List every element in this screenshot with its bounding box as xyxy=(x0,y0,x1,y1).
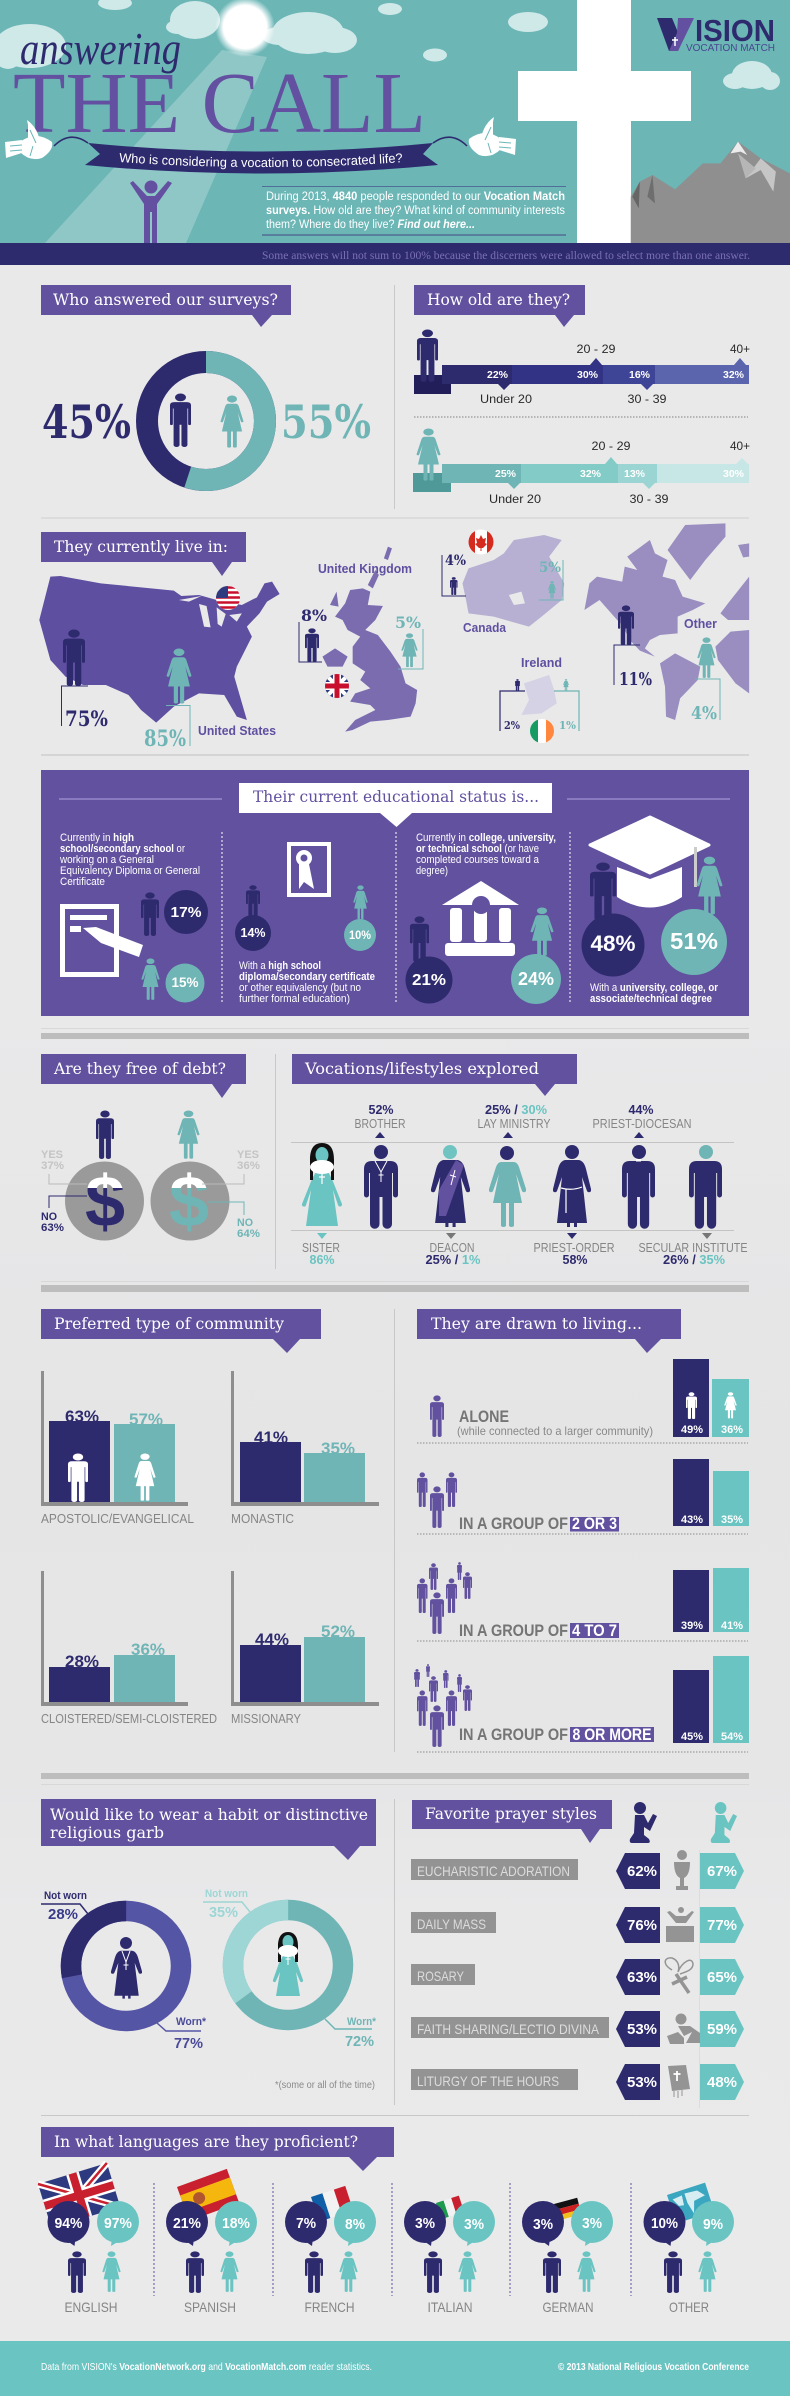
column: Spanish: SPANISH xyxy=(184,2299,236,2315)
column: Other: OTHER xyxy=(669,2299,709,2315)
bottom labels: 86% xyxy=(310,1253,334,1267)
flag: Ireland xyxy=(530,719,554,743)
label: male not worn xyxy=(41,1890,88,1923)
bottom labels: SECULAR INSTITUTE xyxy=(638,1241,748,1255)
row: group of 8 or more xyxy=(414,1656,749,1747)
map: other world: Other xyxy=(684,617,717,631)
column: Spanish: 21% xyxy=(173,2216,201,2232)
heading xyxy=(41,1309,321,1353)
row: rosary xyxy=(411,1958,744,1995)
icon: female coin: $ xyxy=(169,1162,209,1242)
chart: apostolic: 57% xyxy=(129,1410,163,1429)
icon: form and pencil xyxy=(62,906,143,974)
label: female worn xyxy=(325,2016,377,2050)
chart: missionary: 44% xyxy=(255,1630,289,1649)
person with raised arms xyxy=(130,180,172,243)
map: United States: 75% xyxy=(65,706,108,731)
row: rosary: ROSARY xyxy=(417,1968,465,1984)
heading xyxy=(41,1799,376,1860)
female age bar: Under 20 xyxy=(489,492,541,506)
female age bar: 40+ xyxy=(730,439,750,453)
heading xyxy=(414,285,585,327)
chart: monastic: 35% xyxy=(321,1439,355,1458)
column: Other: 10% xyxy=(651,2216,678,2232)
row: faith sharing: FAITH SHARING/LECTIO DIVINA xyxy=(417,2021,600,2037)
map: United States: United States xyxy=(198,724,276,738)
column: German: 3% xyxy=(582,2216,602,2232)
chart: cloistered: 36% xyxy=(131,1640,165,1659)
icon: male coin xyxy=(65,1110,144,1242)
heading: Vocations/lifestyles explored xyxy=(304,1060,539,1078)
top labels: BROTHER xyxy=(354,1117,406,1131)
map: Ireland xyxy=(500,656,579,743)
chart: cloistered: CLOISTERED/SEMI-CLOISTERED xyxy=(41,1712,217,1726)
column: high school students: 15% xyxy=(172,974,199,990)
cross xyxy=(518,0,691,243)
column: high school diploma: 14% xyxy=(240,926,266,940)
labels xyxy=(41,1149,260,1240)
row: rosary: 63% xyxy=(627,1970,657,1986)
map: Ireland: 1% xyxy=(559,719,577,732)
column: English: 97% xyxy=(104,2216,132,2232)
note band: Some answers will not sum to 100% because the discerners were allowed to select more than one answer. xyxy=(262,250,750,262)
icon: chalice xyxy=(674,1850,690,1890)
icon: building xyxy=(442,881,519,956)
row: faith sharing: 59% xyxy=(707,2022,737,2038)
label: male worn: 77% xyxy=(174,2035,203,2052)
column: university degree: 51% xyxy=(670,928,718,954)
male age bar: 20 - 29 xyxy=(576,342,616,356)
bottom labels xyxy=(302,1233,748,1267)
top labels: 44% xyxy=(628,1103,654,1117)
intro text: surveys. How old are they? What kind of community interests xyxy=(266,205,565,217)
figure: sister xyxy=(302,1143,342,1226)
row: alone: 49% xyxy=(681,1424,703,1436)
map: Canada xyxy=(442,529,564,635)
column: German: GERMAN xyxy=(542,2299,594,2315)
bottom labels: PRIEST-ORDER xyxy=(534,1241,614,1255)
heading: Would like to wear a habit or distinctive xyxy=(50,1806,368,1824)
panel: vocations explored xyxy=(291,1054,748,1267)
male age bar: Under 20 xyxy=(480,392,532,406)
column: German xyxy=(522,2201,613,2315)
row: faith sharing: 53% xyxy=(627,2022,657,2038)
footer: © 2013 National Religious Vocation Conference xyxy=(558,2361,749,2373)
panel: who answered our surveys xyxy=(41,285,371,480)
icon: kneeling man xyxy=(630,1802,657,1843)
ribbon banner xyxy=(54,136,468,174)
heading: Who answered our surveys? xyxy=(53,291,278,309)
labels: YES xyxy=(237,1149,259,1161)
figure: priest diocesan xyxy=(622,1145,655,1229)
column: university degree xyxy=(582,817,727,1005)
flag: France xyxy=(311,2186,353,2222)
column: French: 7% xyxy=(296,2216,316,2232)
row: daily mass: 77% xyxy=(707,1918,737,1934)
chart: apostolic: 63% xyxy=(65,1407,99,1426)
sun xyxy=(215,0,275,57)
row: group of 4 to 7: 39% xyxy=(681,1620,703,1632)
column: high school diploma: With a high school xyxy=(239,960,321,972)
heading xyxy=(412,1800,612,1843)
chart: monastic: 41% xyxy=(254,1428,288,1447)
male age bar: 30% xyxy=(577,370,598,381)
flag: Canada xyxy=(468,529,494,555)
female age bar: 20 - 29 xyxy=(592,439,631,453)
panel: favorite prayer styles xyxy=(411,1800,744,2108)
bottom labels: DEACON xyxy=(430,1241,474,1255)
column: college: Currently in college, university, xyxy=(416,832,556,844)
ribbon banner: Who is considering a vocation to consecrated life? xyxy=(120,153,402,170)
column: college: degree) xyxy=(416,865,448,877)
flag: UK large xyxy=(38,2163,120,2228)
row: alone xyxy=(430,1359,749,1438)
figure: brother xyxy=(364,1145,398,1229)
column: high school diploma: or other equivalency (but no xyxy=(239,982,361,994)
row: group of 4 to 7: IN A GROUP OF xyxy=(459,1622,568,1640)
label: female worn: 72% xyxy=(345,2033,374,2050)
map: other world xyxy=(584,523,749,724)
top labels: LAY MINISTRY xyxy=(478,1117,551,1131)
labels: YES xyxy=(41,1149,63,1161)
column: high school diploma: diploma/secondary certificate xyxy=(239,971,375,983)
row: group of 8 or more: IN A GROUP OF xyxy=(459,1726,568,1744)
icon: reader xyxy=(667,2014,700,2044)
chart: missionary: MISSIONARY xyxy=(231,1712,302,1726)
chart: monastic: MONASTIC xyxy=(231,1512,294,1526)
icon: male coin: $ xyxy=(85,1162,125,1242)
row: daily mass xyxy=(411,1907,744,1943)
label: male worn xyxy=(157,2016,207,2052)
column: Other xyxy=(644,2201,734,2315)
female age bar xyxy=(413,429,750,506)
labels: 64% xyxy=(237,1228,260,1240)
top labels: 25% / 30% xyxy=(485,1103,547,1117)
label: male worn: Worn* xyxy=(176,2016,207,2028)
column: Spanish xyxy=(166,2201,257,2315)
label: female not worn: Not worn xyxy=(205,1888,248,1900)
chart: cloistered xyxy=(41,1571,217,1726)
title: the call: THE CALL xyxy=(13,54,426,151)
heading: They are drawn to living... xyxy=(431,1315,642,1333)
row: eucharistic adoration: EUCHARISTIC ADORATION xyxy=(417,1863,570,1879)
column: English xyxy=(48,2201,139,2315)
panel: preferred type of community xyxy=(41,1309,379,1726)
map: United Kingdom xyxy=(299,547,423,732)
map: Ireland: Ireland xyxy=(521,656,562,670)
flag: world map xyxy=(667,2183,714,2224)
panel: drawn to living xyxy=(414,1309,749,1752)
map: United States xyxy=(39,576,280,752)
row: liturgy of the hours: LITURGY OF THE HOURS xyxy=(417,2073,559,2089)
column: Italian: 3% xyxy=(464,2217,484,2233)
title: answering: answering xyxy=(20,23,181,74)
column: college: 24% xyxy=(518,969,554,989)
row: liturgy of the hours: 53% xyxy=(627,2075,657,2091)
row: daily mass: 76% xyxy=(627,1918,657,1934)
icon: prayer book xyxy=(668,2065,690,2098)
row: faith sharing xyxy=(411,2011,744,2047)
heading xyxy=(41,532,246,576)
column: French: FRENCH xyxy=(304,2299,354,2315)
panel: languages xyxy=(38,2127,734,2315)
panel: they currently live in xyxy=(39,523,749,752)
dove left xyxy=(5,120,52,159)
intro text: During 2013, 4840 people responded to our Vocation Match xyxy=(266,191,565,203)
footnote: *(some or all of the time) xyxy=(275,2080,375,2091)
label: male not worn: Not worn xyxy=(44,1890,87,1902)
footer: Data from VISION's VocationNetwork.org and VocationMatch.com reader statistics. xyxy=(41,2361,372,2373)
label: female not worn xyxy=(203,1888,250,1921)
intro text xyxy=(262,186,566,236)
column: university degree: With a university, college, or xyxy=(590,982,719,994)
row: group of 2 or 3: 35% xyxy=(721,1514,743,1526)
heading xyxy=(292,1054,577,1096)
row: rosary: 65% xyxy=(707,1970,737,1986)
chart: apostolic xyxy=(41,1371,194,1526)
panel: how old are they xyxy=(413,285,750,506)
column: university degree: 48% xyxy=(590,931,636,956)
map: United Kingdom: United Kingdom xyxy=(318,562,412,576)
heading: Are they free of debt? xyxy=(53,1060,226,1078)
map: Canada: 5% xyxy=(539,560,561,576)
donut: female garb xyxy=(211,1888,365,2042)
map: Ireland: 2% xyxy=(504,719,520,732)
light beam xyxy=(45,50,267,243)
row: liturgy of the hours xyxy=(411,2064,744,2100)
donut: male garb xyxy=(62,1902,190,2030)
row: group of 2 or 3 xyxy=(417,1459,749,1533)
icon: priest at altar xyxy=(666,1907,694,1942)
top labels: PRIEST-DIOCESAN xyxy=(592,1117,692,1131)
column: French xyxy=(285,2201,376,2315)
map: United Kingdom: 5% xyxy=(395,613,421,632)
logo: Vision Vocation Match: ISION xyxy=(695,13,775,48)
icon: male coin: $ xyxy=(85,1162,125,1242)
panel: educational status xyxy=(41,770,749,1016)
top labels xyxy=(354,1103,692,1138)
bottom labels: 58% xyxy=(562,1253,588,1267)
column: high school students: 17% xyxy=(170,904,202,921)
figure: priest order xyxy=(553,1145,591,1227)
column: Italian: ITALIAN xyxy=(428,2299,472,2315)
55 percent: 55% xyxy=(281,395,371,449)
row: alone: ALONE xyxy=(459,1408,509,1426)
column: high school students: school/secondary school or xyxy=(60,843,185,855)
labels: NO xyxy=(237,1217,253,1229)
male age bar: 30 - 39 xyxy=(628,392,667,406)
clouds xyxy=(0,0,780,90)
column: Spanish: 18% xyxy=(222,2216,250,2232)
column: university degree: associate/technical degree xyxy=(590,993,712,1005)
column: German: 3% xyxy=(533,2217,553,2233)
heading xyxy=(41,285,291,327)
column: high school diploma xyxy=(235,844,376,1005)
heading xyxy=(417,1309,681,1353)
row: group of 4 to 7: 4 TO 7 xyxy=(572,1622,617,1640)
label: male not worn: 28% xyxy=(48,1906,78,1923)
map: other world: 11% xyxy=(619,669,652,690)
row: group of 8 or more: 8 OR MORE xyxy=(572,1726,652,1744)
flag: Germany xyxy=(554,2198,582,2220)
row: daily mass: DAILY MASS xyxy=(417,1916,486,1932)
bottom labels: 25% / 1% xyxy=(426,1253,480,1267)
heading: How old are they? xyxy=(427,291,570,309)
icon: female coin xyxy=(150,1110,230,1242)
icon: rosary xyxy=(665,1958,693,1993)
map: Canada: Canada xyxy=(463,621,507,635)
figure: lay woman xyxy=(489,1146,526,1227)
icon: female coin: $ xyxy=(169,1162,209,1242)
chart: missionary: 52% xyxy=(321,1622,355,1641)
label: female not worn: 35% xyxy=(209,1904,238,1921)
column: college: 21% xyxy=(412,972,446,989)
bottom labels: 26% / 35% xyxy=(663,1253,725,1267)
gender donut xyxy=(147,362,265,480)
column: high school students: working on a General xyxy=(59,854,154,866)
chart: apostolic: APOSTOLIC/EVANGELICAL xyxy=(41,1512,194,1526)
column: French: 8% xyxy=(345,2217,365,2233)
footer xyxy=(0,2341,790,2396)
dove right xyxy=(469,117,516,156)
female age bar: 32% xyxy=(580,469,601,480)
heading: They currently live in: xyxy=(54,538,228,556)
male age bar: 16% xyxy=(629,370,650,381)
row: alone: 36% xyxy=(721,1424,743,1436)
heading: Preferred type of community xyxy=(54,1315,284,1333)
row: group of 2 or 3: IN A GROUP OF xyxy=(459,1515,568,1533)
chart: cloistered: 28% xyxy=(65,1652,99,1671)
row: group of 8 or more: 45% xyxy=(681,1731,703,1743)
female age bar: 30% xyxy=(723,469,744,480)
male age bar: 32% xyxy=(723,370,744,381)
row: alone: (while connected to a larger community) xyxy=(457,1424,653,1438)
figure: secular institute xyxy=(689,1145,722,1229)
column: English: 94% xyxy=(54,2216,83,2232)
male age bar: 22% xyxy=(487,370,508,381)
column: high school students: Equivalency Diploma or General xyxy=(60,865,200,877)
row: group of 4 to 7 xyxy=(417,1562,749,1640)
map: United Kingdom: 8% xyxy=(301,606,327,625)
column: English: ENGLISH xyxy=(64,2299,118,2315)
heading: In what languages are they proficient? xyxy=(54,2133,358,2151)
icon: diploma xyxy=(289,844,329,895)
row: eucharistic adoration: 62% xyxy=(627,1864,657,1880)
heading: Their current educational status is... xyxy=(253,787,539,806)
flag: Spain xyxy=(177,2169,239,2221)
heading: religious garb xyxy=(50,1824,164,1842)
column: Other: 9% xyxy=(703,2217,723,2233)
column: high school diploma: further formal education) xyxy=(239,993,350,1005)
map: Canada: 4% xyxy=(445,553,466,569)
map: United States: 85% xyxy=(144,726,186,752)
panel: free of debt xyxy=(41,1054,260,1242)
intro text: them? Where do they live? Find out here... xyxy=(266,219,475,231)
icon: graduation cap xyxy=(590,817,709,908)
male age bar xyxy=(414,329,750,406)
top labels: 52% xyxy=(368,1103,394,1117)
bottom labels: SISTER xyxy=(302,1241,340,1255)
figure: deacon xyxy=(431,1145,470,1227)
flag: USA xyxy=(216,586,240,610)
chart: missionary xyxy=(231,1571,379,1726)
labels: 63% xyxy=(41,1222,64,1234)
header banner xyxy=(0,0,790,243)
logo: Vision Vocation Match xyxy=(657,13,775,54)
logo: Vision Vocation Match: VOCATION MATCH xyxy=(686,43,775,54)
female age bar: 25% xyxy=(495,469,516,480)
column: high school students: Currently in high xyxy=(60,832,134,844)
labels: NO xyxy=(41,1211,57,1223)
column: college: or technical school (or have xyxy=(416,843,539,855)
row: group of 2 or 3: 43% xyxy=(681,1514,703,1526)
heading xyxy=(41,1054,246,1098)
heading xyxy=(239,783,552,827)
column: high school students xyxy=(59,832,208,1002)
heading: Favorite prayer styles xyxy=(425,1805,597,1823)
female age bar: 13% xyxy=(624,469,645,480)
45 percent: 45% xyxy=(42,395,131,449)
row: liturgy of the hours: 48% xyxy=(707,2075,737,2091)
row: group of 4 to 7: 41% xyxy=(721,1620,743,1632)
female age bar: 30 - 39 xyxy=(630,492,669,506)
column: college xyxy=(406,832,561,1004)
flag: Italy xyxy=(436,2196,464,2219)
column: college: completed courses toward a xyxy=(416,854,540,866)
male age bar: 40+ xyxy=(730,342,750,356)
labels: 37% xyxy=(41,1160,64,1172)
label: female worn: Worn* xyxy=(347,2016,377,2028)
panel: wear a habit xyxy=(41,1799,377,2091)
column: Italian xyxy=(404,2201,495,2315)
chart: monastic xyxy=(231,1371,379,1526)
icon: kneeling woman xyxy=(711,1802,737,1843)
row: group of 8 or more: 54% xyxy=(721,1731,743,1743)
mountains xyxy=(631,142,790,243)
column: high school diploma: 10% xyxy=(349,930,371,942)
row: group of 2 or 3: 2 OR 3 xyxy=(572,1515,617,1533)
column: Italian: 3% xyxy=(415,2216,435,2232)
map: other world: 4% xyxy=(691,703,717,724)
labels: 36% xyxy=(237,1160,260,1172)
flag: UK xyxy=(325,674,349,698)
row: eucharistic adoration xyxy=(411,1850,744,1890)
note band xyxy=(0,243,790,265)
column: high school students: Certificate xyxy=(60,876,105,888)
heading xyxy=(41,2127,394,2171)
row: eucharistic adoration: 67% xyxy=(707,1864,737,1880)
